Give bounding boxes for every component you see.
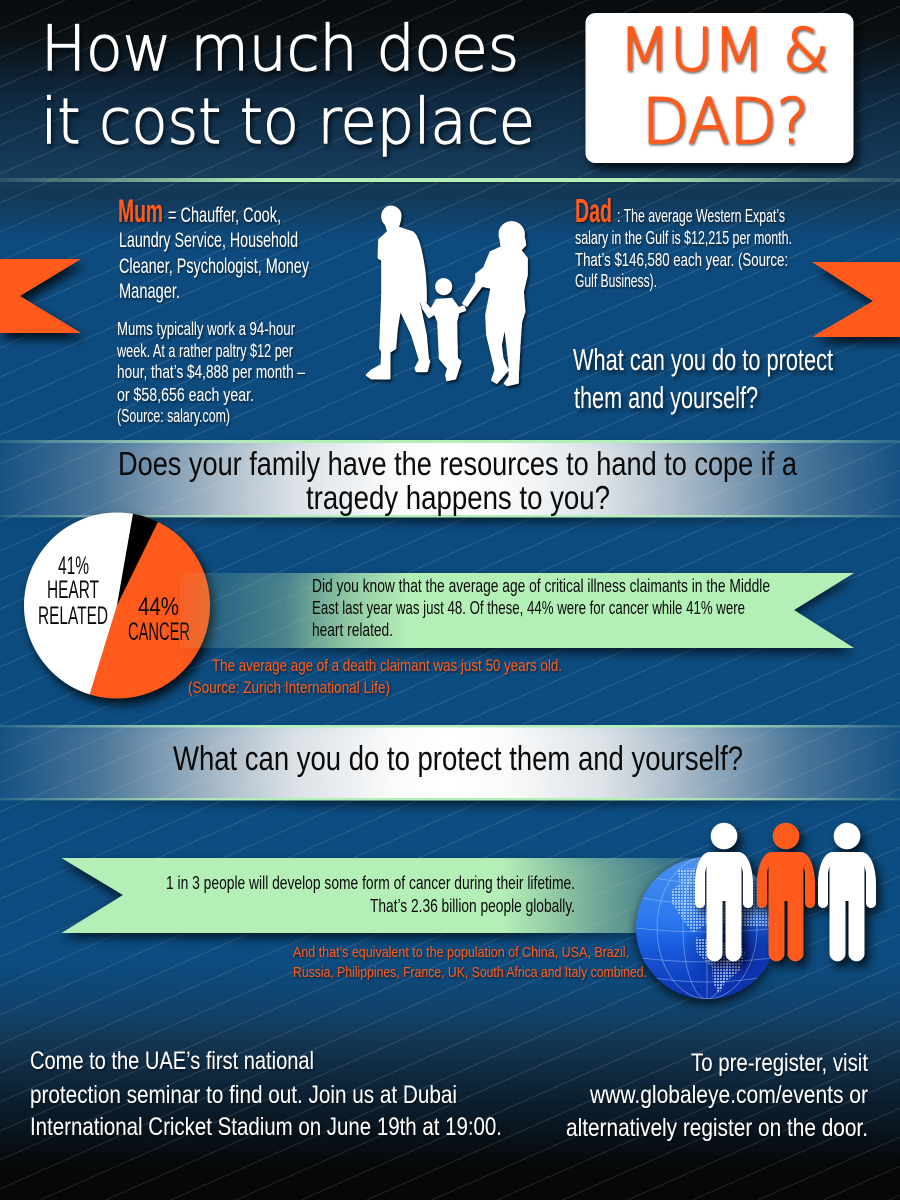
banner: resources heading [0,440,900,518]
text block: dad: salary in the Gulf is $12,215 per month. [575,228,792,248]
callout: mum and dad box: DAD? [642,85,809,158]
pie label: heart: RELATED [38,602,108,630]
callout: mum and dad box [586,13,854,163]
text block: mum: = Chauffer, Cook, [168,204,281,227]
text block: seminar details: International Cricket Stadium on June 19th at 19:00. [30,1113,502,1141]
text block: mum: week. At a rather paltry $12 per [116,341,293,361]
subheading: what can you do: them and yourself? [574,380,758,415]
ribbon: cancer statistic [62,858,700,933]
text block: mum [116,193,309,426]
text block: population comparison: And that’s equivalent to the population of China, USA, Brazil, [293,944,629,961]
text block: population comparison: Russia, Philippines, France, UK, South Africa and Italy combined. [293,964,647,981]
text block: mum: hour, that’s $4,888 per month – [117,362,305,382]
text block: seminar details: Come to the UAE’s first national [30,1047,314,1075]
text block: registration [566,1049,868,1142]
banner: protect heading [0,725,900,800]
ribbon: critical illness: East last year was just 48. Of these, 44% were for cancer while 41% were [312,598,745,618]
ribbon: cancer statistic: 1 in 3 people will develop some form of cancer during their lifetime. [166,873,575,893]
text block: mum: Manager. [119,280,180,303]
pie label: heart: 41% [58,552,89,580]
person: middle orange [757,823,815,961]
text block: mum: Laundry Service, Household [119,229,298,252]
pie label: cancer: CANCER [128,618,190,646]
pie label: cancer [128,593,190,646]
text block: dad: : The average Western Expat’s [617,206,785,226]
person: right [818,823,876,961]
icon: left orange flag [0,259,81,333]
pie label: heart [38,552,108,630]
title: How much does [41,12,519,85]
callout: mum and dad box: MUM & [619,15,829,84]
person: left [695,823,753,961]
pie label: cancer: 44% [138,593,179,621]
title: it cost to replace [41,85,535,158]
icon: right orange flag [812,262,900,337]
pie label: heart: HEART [47,576,99,604]
text block: mum: or $58,656 each year. [117,385,254,405]
text block: death claimant [188,656,562,697]
title [41,12,535,158]
ribbon: critical illness: heart related. [312,620,393,640]
ribbon: critical illness: Did you know that the average age of critical illness claimants in the Middle [312,576,770,596]
text block: mum: Mum [118,193,163,229]
text block: population comparison [293,944,647,981]
text block: mum: Mums typically work a 94-hour [117,319,295,339]
banner: resources heading: tragedy happens to you? [306,479,610,516]
text block: seminar details [30,1047,502,1141]
text block: seminar details: protection seminar to find out. Join us at Dubai [30,1081,457,1109]
text block: mum: (Source: salary.com) [117,406,230,426]
banner: protect heading: What can you do to protect them and yourself? [173,740,743,778]
ribbon: cancer statistic: That’s 2.36 billion people globally. [370,896,575,916]
pie chart [22,512,220,711]
text block: dad: That’s $146,580 each year. (Source: [575,250,788,270]
icon: globe [636,857,778,999]
text block: mum: Cleaner, Psychologist, Money [119,255,309,278]
icon: three people [695,823,876,961]
text block: dad: Gulf Business). [575,271,657,291]
text block: death claimant: The average age of a death claimant was just 50 years old. [212,656,562,675]
text block: dad [575,192,792,291]
subheading: what can you do [573,342,833,415]
text block: death claimant: (Source: Zurich International Life) [188,678,390,697]
text block: dad: Dad [575,192,612,229]
icon: family silhouette [367,207,527,385]
ribbon: critical illness [180,573,854,648]
